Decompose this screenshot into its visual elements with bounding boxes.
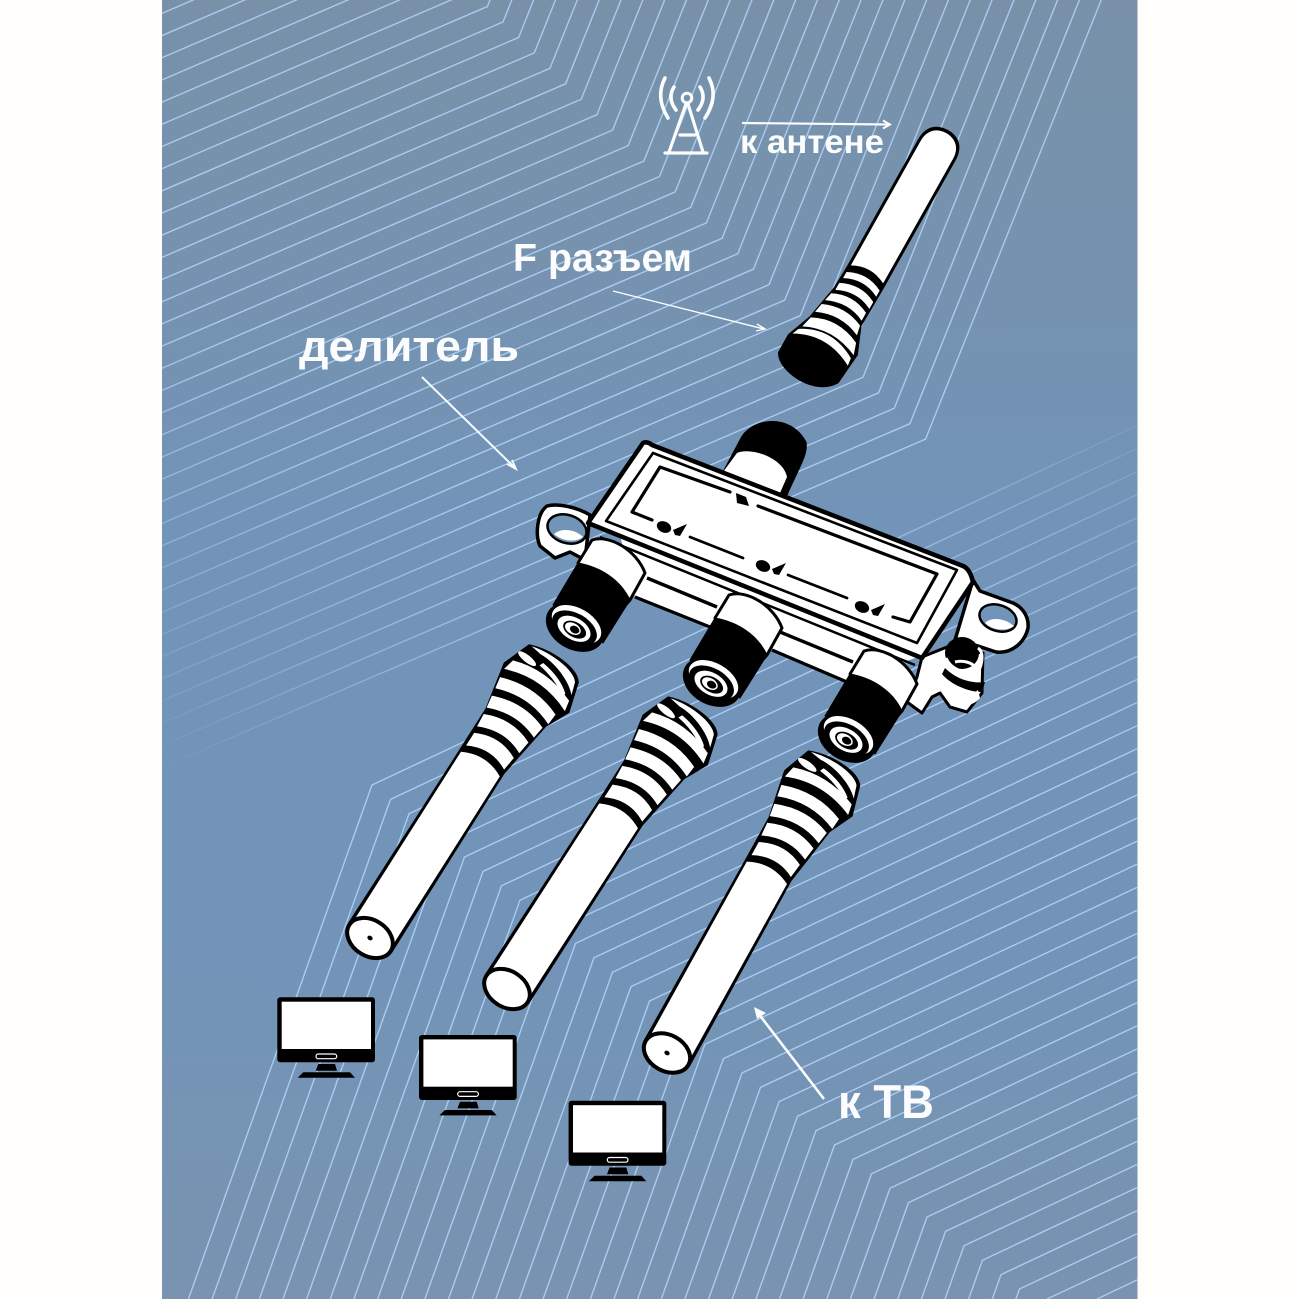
- housing body: [588, 442, 973, 658]
- lower body rail line: [600, 537, 915, 665]
- rear input port: [723, 421, 806, 495]
- output port 1: [537, 539, 645, 662]
- cable 1: [332, 636, 589, 978]
- arrow: F connector: [613, 291, 765, 331]
- splitter device: [537, 421, 1028, 773]
- background panel: [162, 0, 1138, 1299]
- arrow: to antenna: [742, 120, 890, 128]
- right lug and ground screw: [907, 580, 1028, 713]
- output port 2: [674, 594, 782, 717]
- lower body and mounting rails: [620, 535, 918, 682]
- circuit label outline: [632, 467, 937, 622]
- background chevron lines: lower group: [188, 426, 1137, 1299]
- label: делитель: делитель: [299, 322, 519, 371]
- label: к антене: к антене: [740, 123, 884, 160]
- icon: monitor 2: [419, 1035, 517, 1115]
- icon: monitor 1: [277, 997, 375, 1078]
- cable 2: [470, 688, 728, 1029]
- label: к ТВ: к ТВ: [838, 1075, 934, 1128]
- label: F разъем: F разъем: [513, 237, 692, 280]
- cable 3: [629, 742, 871, 1091]
- label marks: [655, 493, 885, 616]
- icon: monitor 3: [569, 1101, 666, 1181]
- arrow: splitter: [422, 377, 516, 469]
- icon: antenna tower: [661, 78, 713, 153]
- output port 3: [809, 650, 917, 773]
- housing inner border: [606, 453, 957, 643]
- left mounting lug: [537, 505, 590, 560]
- cable: top antenna F connector: [773, 113, 973, 398]
- background chevron lines: upper group: [162, 0, 1102, 743]
- arrow: to TV: [754, 1007, 824, 1099]
